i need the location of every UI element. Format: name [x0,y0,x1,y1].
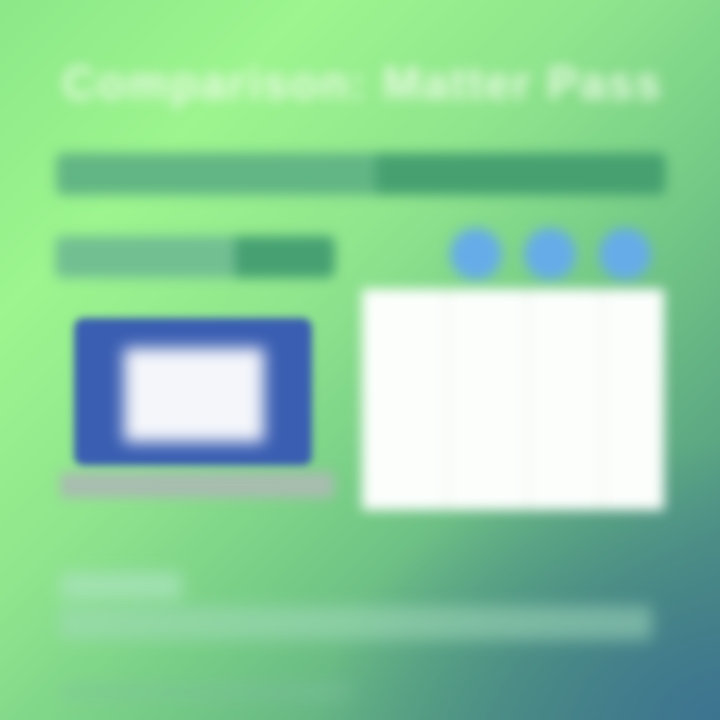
header bar [56,153,666,195]
icon: blue circle 3 [599,228,651,280]
icon: blue circle 1 [450,228,502,280]
laptop base [60,472,334,498]
comparison table [362,289,664,510]
header bar: left segment [56,153,376,195]
table cell lines [362,289,664,510]
title: Comparison: Matter Pass [62,57,663,109]
column icons [443,221,658,286]
laptop screen content [124,348,264,442]
icon: blue circle 2 [524,228,576,280]
icon: laptop [55,312,340,504]
sub-header pill [55,236,335,278]
footer text [58,606,652,640]
footer heading [60,572,182,600]
footer note [60,684,352,700]
sub-header pill: left segment [55,236,235,278]
laptop screen [74,318,312,466]
